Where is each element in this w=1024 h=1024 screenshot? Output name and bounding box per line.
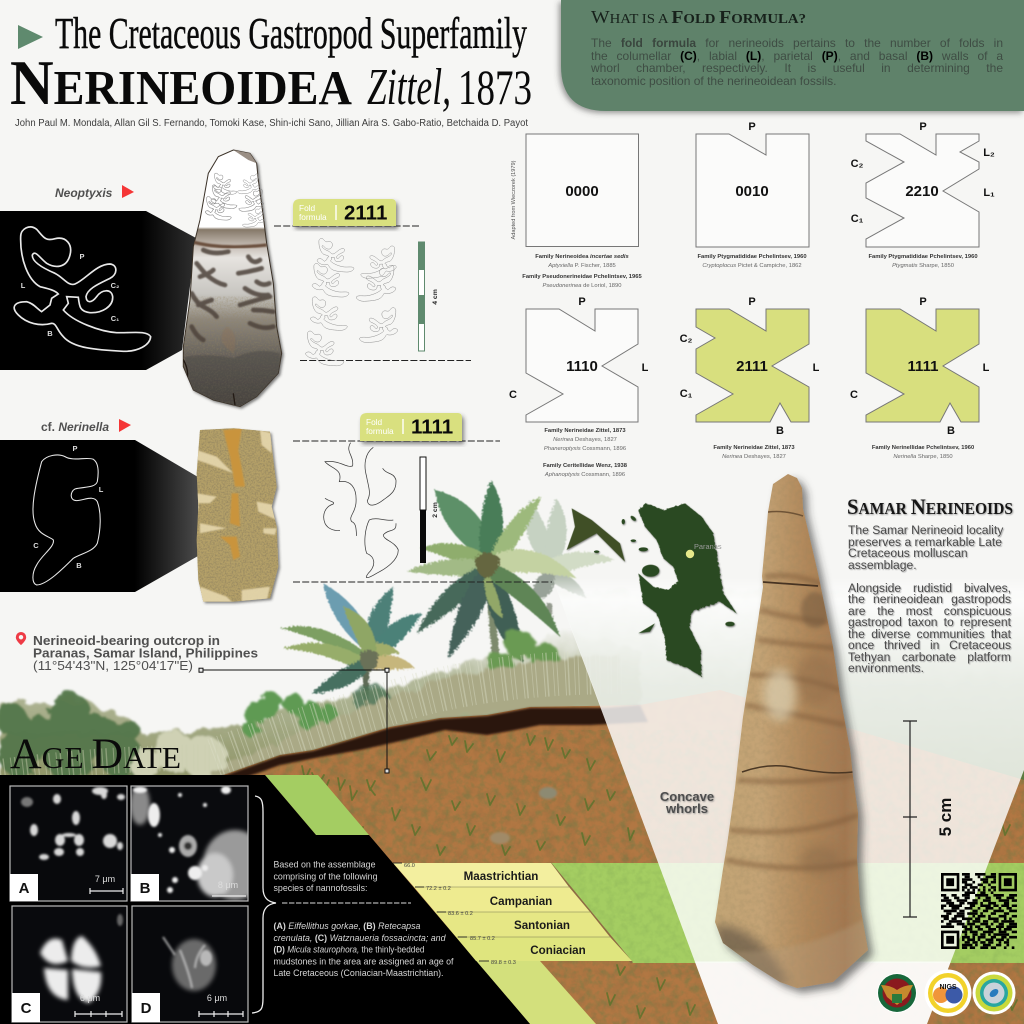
text: fold formula definition: The fold formula for nerineoids pertains to the number of folds in <box>591 36 1003 50</box>
panel: age date black area <box>0 775 530 1024</box>
text: Samar nerineoids description <box>848 523 1012 675</box>
diagram 0000: Family Pseudonerineidae Pchelintsev, 1965 <box>522 274 642 280</box>
heading: what is a fold formula: WHAT IS A FOLD FORMULA? <box>591 7 806 27</box>
translucent wedge over landscape <box>552 577 1024 1024</box>
diagram 1111: Nerinella Sharpe, 1850 <box>893 454 953 460</box>
logo: NIGS <box>924 970 972 1016</box>
location label: (11°54'43"N, 125°04'17"E) <box>33 658 193 673</box>
location label: Paranas, Samar Island, Philippines <box>33 646 258 660</box>
text: fold formula definition <box>591 36 1003 88</box>
text: nannofossil description: (A) Eiffellithus gorkae, (B) Retecapsa <box>274 921 420 931</box>
fold diagrams grid <box>509 121 995 478</box>
scale 6 µm: 6 μm <box>207 993 227 1003</box>
panel: Nerinella whorl section: C <box>33 541 39 550</box>
timeline: stage bands: 83.6 ± 0.2 <box>448 911 473 917</box>
diagram 2210 <box>851 121 995 269</box>
specimen: cf. Nerinella section <box>193 427 280 603</box>
text: Samar nerineoids description: preserves a remarkable Late <box>848 534 1002 548</box>
credit: adapted from Wieczorek: Adapted from Wieczorek (1979) <box>511 160 517 239</box>
diagram 1110: Aphanoptyxis Cossmann, 1896 <box>544 472 625 478</box>
diagram 2111: C₂ <box>680 333 693 345</box>
text: Samar nerineoids description: The Samar Nerineoid locality <box>848 523 1003 537</box>
label: Neoptyxis <box>55 185 134 200</box>
scale bar: 5 cm <box>903 721 955 917</box>
text: Samar nerineoids description: Tethyan carbonate platform <box>848 650 1011 664</box>
diagram 2111: Family Nerineidae Zittel, 1873 <box>713 445 795 451</box>
diagram 0010: 0010 <box>735 183 769 200</box>
text: nannofossil description: comprising of the following <box>274 872 378 882</box>
panel: Neoptyxis whorl section: L <box>21 281 26 290</box>
panel: Neoptyxis whorl section <box>0 211 196 370</box>
landscape photo: soil slope <box>222 690 1024 1024</box>
back palm <box>526 498 615 620</box>
logo: University seal <box>877 973 917 1013</box>
micrograph D <box>132 906 248 1022</box>
diagram 1110: Nerinea Deshayes, 1827 <box>553 437 617 443</box>
timeline: stage bands: Santonian <box>514 919 570 932</box>
scale bar: 4 cm: 4 cm <box>432 289 439 305</box>
diagram 2111: L <box>813 362 820 374</box>
text: fold formula definition: taxonomic position of the nerineoidean fossils. <box>591 74 836 88</box>
heading: Samar Nerineoids: SAMAR NERINEOIDS <box>847 494 1013 519</box>
seedlings on the slope <box>302 734 1017 1018</box>
fold formula tag 2111: Fold <box>299 203 316 213</box>
map: Samar Island: Paranas <box>694 542 722 551</box>
small palm <box>363 670 369 712</box>
diagram 1110: 1110 <box>566 358 598 375</box>
label: concave whorls <box>660 789 714 816</box>
diagram 1111: L <box>983 362 990 374</box>
diagram 0010: Cryptoplocus Pictet & Campiche, 1862 <box>702 263 802 269</box>
panel: Nerinella whorl section: L <box>99 485 104 494</box>
diagram 1110: Phaneroptyxis Cossmann, 1896 <box>544 446 626 452</box>
diagram 2210: C₂ <box>851 158 864 170</box>
scale bar: 2 cm: 2 cm <box>432 502 439 518</box>
timeline: stage bands: Campanian <box>490 895 552 908</box>
text: Samar nerineoids description: are the most conspicuous <box>848 604 1011 618</box>
text: Samar nerineoids description: Alongside rudistid bivalves, <box>848 580 1011 594</box>
logo: third institute <box>972 972 1016 1014</box>
diagram 2111 <box>680 296 820 460</box>
scale bar: 5 cm: 5 cm <box>936 798 955 836</box>
panel: Nerinella whorl section: B <box>76 561 82 570</box>
text: nannofossil description: Late Cretaceous (Coniacian-Maastrichtian). <box>274 968 444 978</box>
label: cf. Nerinella: cf. Nerinella <box>41 420 109 434</box>
landscape photo: vegetation and grass <box>0 617 1024 780</box>
fold formula tag 2111 <box>293 199 396 226</box>
big palm <box>486 590 501 680</box>
QR code <box>941 873 1017 949</box>
text: Samar nerineoids description: assemblage. <box>848 558 917 572</box>
tag C: C <box>21 1000 32 1017</box>
text: fold formula definition: whorl chamber, respectively. It is useful in determining the <box>591 61 1003 75</box>
micrograph C <box>12 906 127 1022</box>
fold formula tag 1111: Fold <box>366 417 383 427</box>
fold formula panel <box>561 0 1024 111</box>
text: Samar nerineoids description: environments. <box>848 661 924 675</box>
text: fold formula definition: the columellar (C), labial (L), parietal (P), and basal (B) walls of a <box>591 49 1003 63</box>
diagram 0000: Pseudonerinea de Loriol, 1890 <box>543 283 621 289</box>
diagram 2210: C₁ <box>851 213 864 225</box>
text: nannofossil description: (D) Micula staurophora, the thinly-bedded <box>274 944 424 954</box>
timeline: stage bands: 66.0 <box>404 863 415 869</box>
tag A: A <box>19 880 30 897</box>
diagram 1111 <box>850 296 990 460</box>
scale 7 µm: 7 μm <box>95 874 115 884</box>
diagram 2111: 2111 <box>736 358 768 375</box>
heading: Age Date: AGE DATE <box>10 731 181 778</box>
text: Samar nerineoids description: Cretaceous molluscan <box>848 546 968 560</box>
landscape photo: palm trees <box>280 480 615 712</box>
connector line to outcrop <box>199 668 389 773</box>
diagram 0010: Family Ptygmatididae Pchelintsev, 1960 <box>697 254 807 260</box>
panel: Neoptyxis whorl section: P <box>79 252 85 261</box>
diagram 1111: Family Nerinellidae Pchelintsev, 1960 <box>872 445 974 451</box>
text: Samar nerineoids description: the diverse communities that <box>848 626 1011 640</box>
diagram 1111: C <box>850 389 858 401</box>
label: concave whorls: Concave <box>660 789 714 804</box>
diagram 1111: 1111 <box>908 358 938 375</box>
diagram 1110: P <box>578 296 586 308</box>
diagram 1110 <box>509 296 649 478</box>
text: nannofossil description: Based on the assemblage <box>274 860 376 870</box>
timeline: strip below stages <box>476 961 596 1024</box>
label: Neoptyxis: Neoptyxis <box>55 186 113 200</box>
green accent block <box>265 775 369 835</box>
diagram 2111: C₁ <box>680 388 693 400</box>
line drawing: Neoptyxis section <box>306 238 398 366</box>
diagram 2111: B <box>776 425 784 437</box>
line drawing: Nerinella section <box>324 443 398 578</box>
fold formula tag 2111: formula <box>299 212 327 222</box>
location label: Nerineoid-bearing outcrop in <box>33 633 220 648</box>
text: nannofossil description: crenulata, (C) Watznaueria fossacincta; and <box>274 933 446 943</box>
specimen: large Samar nerineoid shell <box>710 470 880 1000</box>
text: nannofossil description: mudstones in the area are assigned an age of <box>274 956 454 966</box>
diagram 0000: Aptyxiella P. Fischer, 1885 <box>547 263 616 269</box>
diagram 0000: Family Nerineoidea incertae sedis <box>535 254 629 260</box>
main title: Zittel, <box>367 59 451 116</box>
location label <box>16 632 258 673</box>
micrograph B <box>130 785 249 902</box>
text: Samar nerineoids description: gastropod taxon to represent <box>848 615 1011 629</box>
text: nannofossil description: species of nannofossils: <box>274 883 368 893</box>
diagram 2111: P <box>748 296 756 308</box>
micrograph A <box>10 786 127 901</box>
diagram 0000 <box>522 134 642 289</box>
grass blades <box>215 672 625 760</box>
panel: Neoptyxis whorl section: C₂ <box>111 281 119 290</box>
authors: John Paul M. Mondala, Allan Gil S. Fernando, Tomoki Kase, Shin-ichi Sano, Jillian Aira S. Gabo-Ratio, Betchaida D. Payot <box>15 118 528 129</box>
diagram 2210: Ptygmatis Sharpe, 1850 <box>892 263 954 269</box>
diagram 2210: 2210 <box>905 183 939 200</box>
scale bar: 2 cm <box>420 457 439 563</box>
panel: Nerinella whorl section <box>0 440 198 592</box>
map: Samar Island <box>567 503 737 677</box>
timeline: stage bands <box>393 863 632 966</box>
diagram 1110: Family Ceritellidae Wenz, 1938 <box>543 463 628 469</box>
icon: location pin <box>16 632 26 645</box>
diagram 0000: 0000 <box>565 183 599 200</box>
brace <box>252 796 276 1013</box>
text: nannofossil description <box>274 860 454 978</box>
diagram 2210: L₁ <box>983 187 995 199</box>
eroded dark edge of topsoil <box>215 705 648 783</box>
timeline: stage bands: 85.7 ± 0.2 <box>470 936 495 942</box>
diagram 2210: L₂ <box>983 147 995 159</box>
scale bar: 4 cm <box>418 242 439 351</box>
fold formula tag 2111: 2111 <box>344 202 387 224</box>
timeline: stage bands: Coniacian <box>530 944 586 957</box>
diagram 2210: P <box>919 121 927 133</box>
diagram 1110: Family Nerineidae Zittel, 1873 <box>544 428 626 434</box>
main title: NERINEOIDEA <box>10 47 353 118</box>
main title: 1873 <box>458 59 532 115</box>
timeline: stage bands: Maastrichtian <box>464 870 538 883</box>
diagram 2111: Nerinea Deshayes, 1827 <box>722 454 786 460</box>
tag D: D <box>141 1000 152 1017</box>
scale 8 µm: 8 μm <box>218 880 238 890</box>
tag B: B <box>140 880 151 897</box>
diagram 0010: P <box>748 121 756 133</box>
diagram 0010 <box>696 121 809 269</box>
dashed guide lines <box>274 226 552 582</box>
fold formula tag 1111 <box>360 413 462 441</box>
diagram 1110: C <box>509 389 517 401</box>
main title <box>10 9 532 129</box>
panel: Neoptyxis whorl section: C₁ <box>111 314 119 323</box>
diagram 1111: P <box>919 296 927 308</box>
icon: title triangle <box>18 25 43 49</box>
text: Samar nerineoids description: once thrived in Cretaceous <box>848 638 1011 652</box>
fold formula tag 1111: formula <box>366 426 394 436</box>
specimen: Neoptyxis longitudinal section <box>180 150 287 410</box>
scale 6 µm: 6 μm <box>80 993 100 1003</box>
panel: Nerinella whorl section: P <box>72 444 78 453</box>
label: concave whorls: whorls <box>665 801 708 816</box>
main title: The Cretaceous Gastropod Superfamily <box>55 9 527 58</box>
logo: NIGS: NIGS <box>939 984 957 991</box>
timeline: stage bands: 89.8 ± 0.3 <box>491 960 516 966</box>
text: Samar nerineoids description: the nerineoidean gastropods <box>848 592 1011 606</box>
green band behind timeline <box>550 863 1024 963</box>
diagram 2210: Family Ptygmatididae Pchelintsev, 1960 <box>868 254 978 260</box>
fold formula tag 1111: 1111 <box>411 416 453 438</box>
diagram 1110: L <box>642 362 649 374</box>
panel: Neoptyxis whorl section: B <box>47 329 53 338</box>
diagram 1111: B <box>947 425 955 437</box>
timeline: stage bands: 72.2 ± 0.2 <box>426 886 451 892</box>
